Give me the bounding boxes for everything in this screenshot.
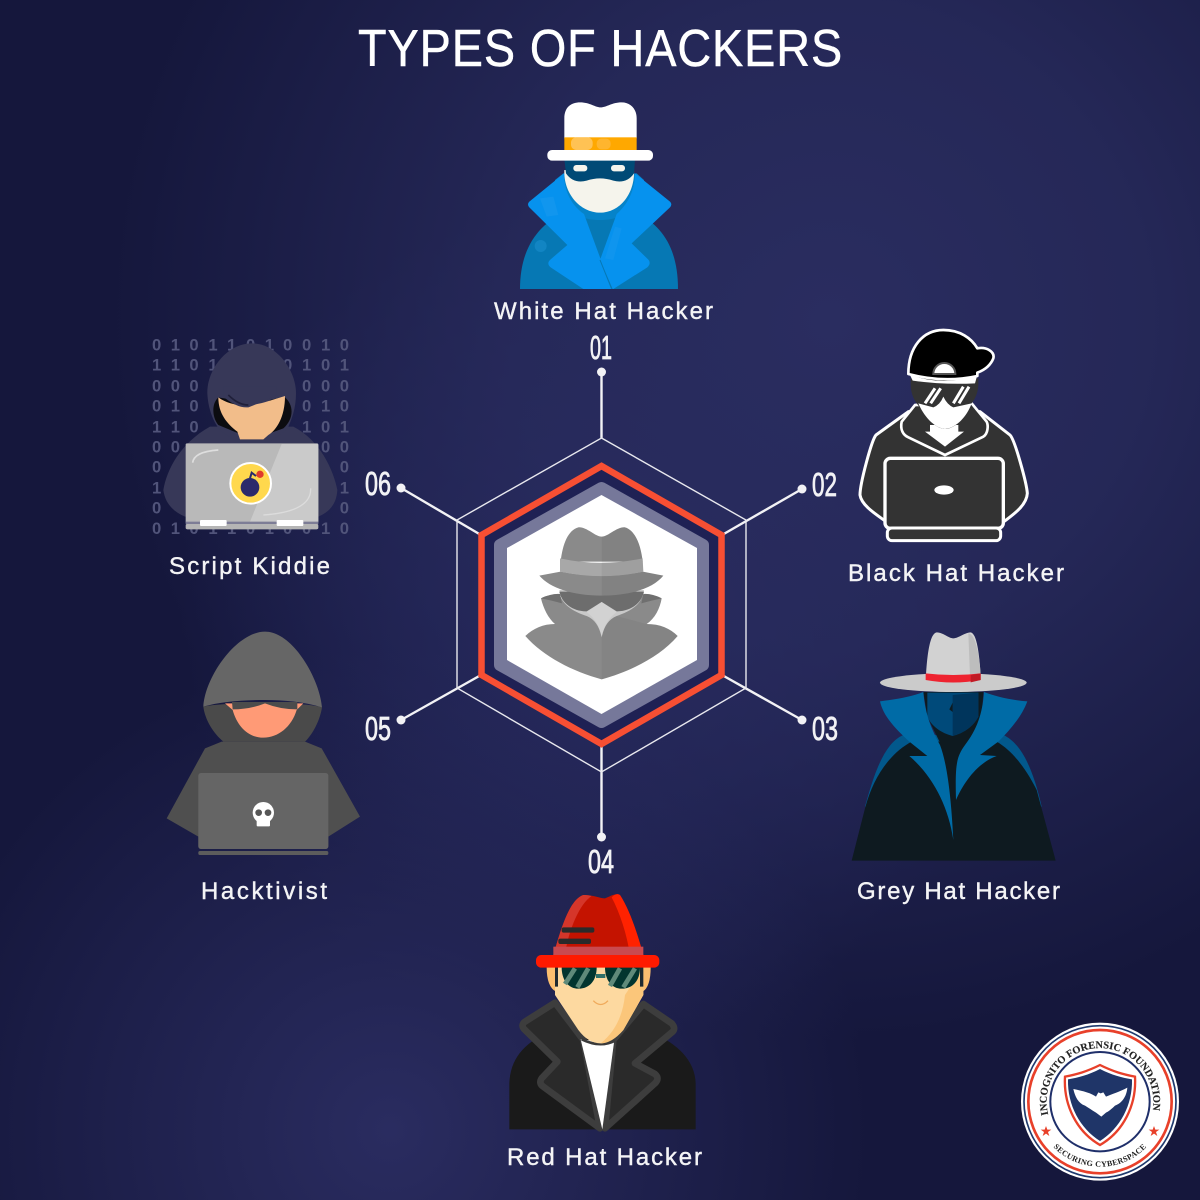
binary digit backdrop: 0 — [321, 437, 330, 456]
grey hexagon — [500, 488, 703, 722]
white hexagon — [507, 495, 697, 714]
icon: hacktivist — [167, 632, 360, 855]
binary digit backdrop: 0 — [283, 336, 292, 355]
binary digit backdrop: 1 — [340, 417, 349, 436]
binary digit backdrop: 0 — [283, 356, 292, 375]
binary digit backdrop: 1 — [171, 519, 180, 538]
binary digit backdrop: 0 — [189, 417, 199, 436]
binary digit backdrop: 1 — [227, 519, 236, 538]
binary digit backdrop: 0 — [152, 437, 161, 456]
logo: Incognito Forensic Foundation badge — [1021, 1022, 1179, 1181]
binary digit backdrop: 0 — [246, 336, 255, 355]
logo top text: INCOGNITO FORENSIC FOUNDATION — [1040, 1041, 1160, 1116]
number 02: 02 — [812, 466, 837, 503]
binary digit backdrop: 0 — [152, 376, 161, 395]
number 05: 05 — [365, 710, 391, 747]
panel: central hexagon diagram — [396, 368, 806, 842]
label: Script Kiddie: Script Kiddie — [169, 553, 330, 580]
binary digit backdrop: 1 — [321, 519, 330, 538]
logo stars — [1041, 1126, 1159, 1136]
binary digit backdrop: 0 — [321, 356, 330, 375]
binary digit backdrop: 1 — [171, 356, 180, 375]
binary digit backdrop: 1 — [152, 356, 161, 375]
title: TYPES OF HACKERS — [358, 20, 842, 78]
thin outer hexagon — [457, 438, 746, 772]
red hexagon — [482, 466, 722, 744]
binary digit backdrop: 0 — [246, 519, 255, 538]
label: Red Hat Hacker: Red Hat Hacker — [507, 1144, 702, 1171]
binary digit backdrop: 1 — [302, 356, 311, 375]
binary digit backdrop: 1 — [208, 356, 218, 375]
label: Black Hat Hacker: Black Hat Hacker — [848, 560, 1064, 587]
binary digit backdrop: 0 — [321, 376, 330, 395]
binary digit backdrop: 0 — [189, 356, 199, 375]
binary digit backdrop: 0 — [321, 417, 330, 436]
binary digit backdrop: 1 — [321, 396, 330, 415]
number 03: 03 — [812, 710, 838, 747]
binary digit backdrop: 0 — [189, 396, 199, 415]
binary digit backdrop: 0 — [283, 519, 292, 538]
binary digit backdrop — [152, 336, 349, 538]
binary digit backdrop: 0 — [302, 376, 311, 395]
binary digit backdrop: 0 — [152, 396, 161, 415]
binary digit backdrop: 1 — [171, 417, 180, 436]
binary digit backdrop: 1 — [340, 478, 349, 497]
icon: central spy — [525, 527, 678, 679]
binary digit backdrop: 0 — [152, 519, 161, 538]
binary digit backdrop: 1 — [321, 336, 330, 355]
binary digit backdrop: 0 — [152, 336, 161, 355]
icon: grey hat hacker — [852, 632, 1056, 861]
binary digit backdrop: 0 — [171, 376, 180, 395]
icon: red hat hacker — [509, 894, 696, 1129]
binary digit backdrop: 0 — [340, 498, 349, 517]
binary digit backdrop: 0 — [340, 437, 349, 456]
binary digit backdrop: 1 — [265, 519, 274, 538]
binary digit backdrop: 1 — [208, 519, 218, 538]
binary digit backdrop: 0 — [189, 336, 199, 355]
number 06: 06 — [365, 465, 391, 502]
binary digit backdrop: 0 — [171, 437, 180, 456]
binary digit backdrop: 0 — [340, 336, 349, 355]
binary digit backdrop: 0 — [302, 396, 311, 415]
binary digit backdrop: 0 — [189, 376, 199, 395]
spokes with end dots — [396, 368, 806, 842]
binary digit backdrop: 1 — [152, 417, 161, 436]
number 04: 04 — [588, 843, 614, 880]
label: Grey Hat Hacker: Grey Hat Hacker — [857, 878, 1060, 905]
binary digit backdrop: 1 — [302, 417, 311, 436]
number 01: 01 — [590, 329, 612, 366]
label: White Hat Hacker: White Hat Hacker — [494, 298, 713, 325]
binary digit backdrop: 1 — [152, 478, 161, 497]
binary digit backdrop: 1 — [340, 356, 349, 375]
binary digit backdrop: 0 — [340, 519, 349, 538]
binary digit backdrop: 0 — [189, 519, 199, 538]
icon: white hat hacker — [520, 102, 678, 289]
logo bottom text: SECURING CYBERSPACE — [1054, 1144, 1146, 1167]
binary digit backdrop: 0 — [152, 498, 161, 517]
binary digit backdrop: 0 — [152, 457, 161, 476]
binary digit backdrop: 0 — [302, 519, 311, 538]
binary digit backdrop: 0 — [340, 396, 349, 415]
icon: script kiddie — [152, 336, 349, 538]
binary digit backdrop: 1 — [227, 336, 236, 355]
binary digit backdrop: 0 — [340, 457, 349, 476]
binary digit backdrop: 1 — [171, 396, 180, 415]
logo shield — [1065, 1065, 1135, 1145]
binary digit backdrop: 1 — [171, 336, 180, 355]
binary digit backdrop: 1 — [265, 336, 274, 355]
binary digit backdrop: 0 — [302, 336, 311, 355]
icon: black hat hacker — [860, 330, 1027, 541]
binary digit backdrop: 0 — [340, 376, 349, 395]
binary digit backdrop: 1 — [208, 336, 218, 355]
label: Hacktivist: Hacktivist — [201, 878, 327, 905]
